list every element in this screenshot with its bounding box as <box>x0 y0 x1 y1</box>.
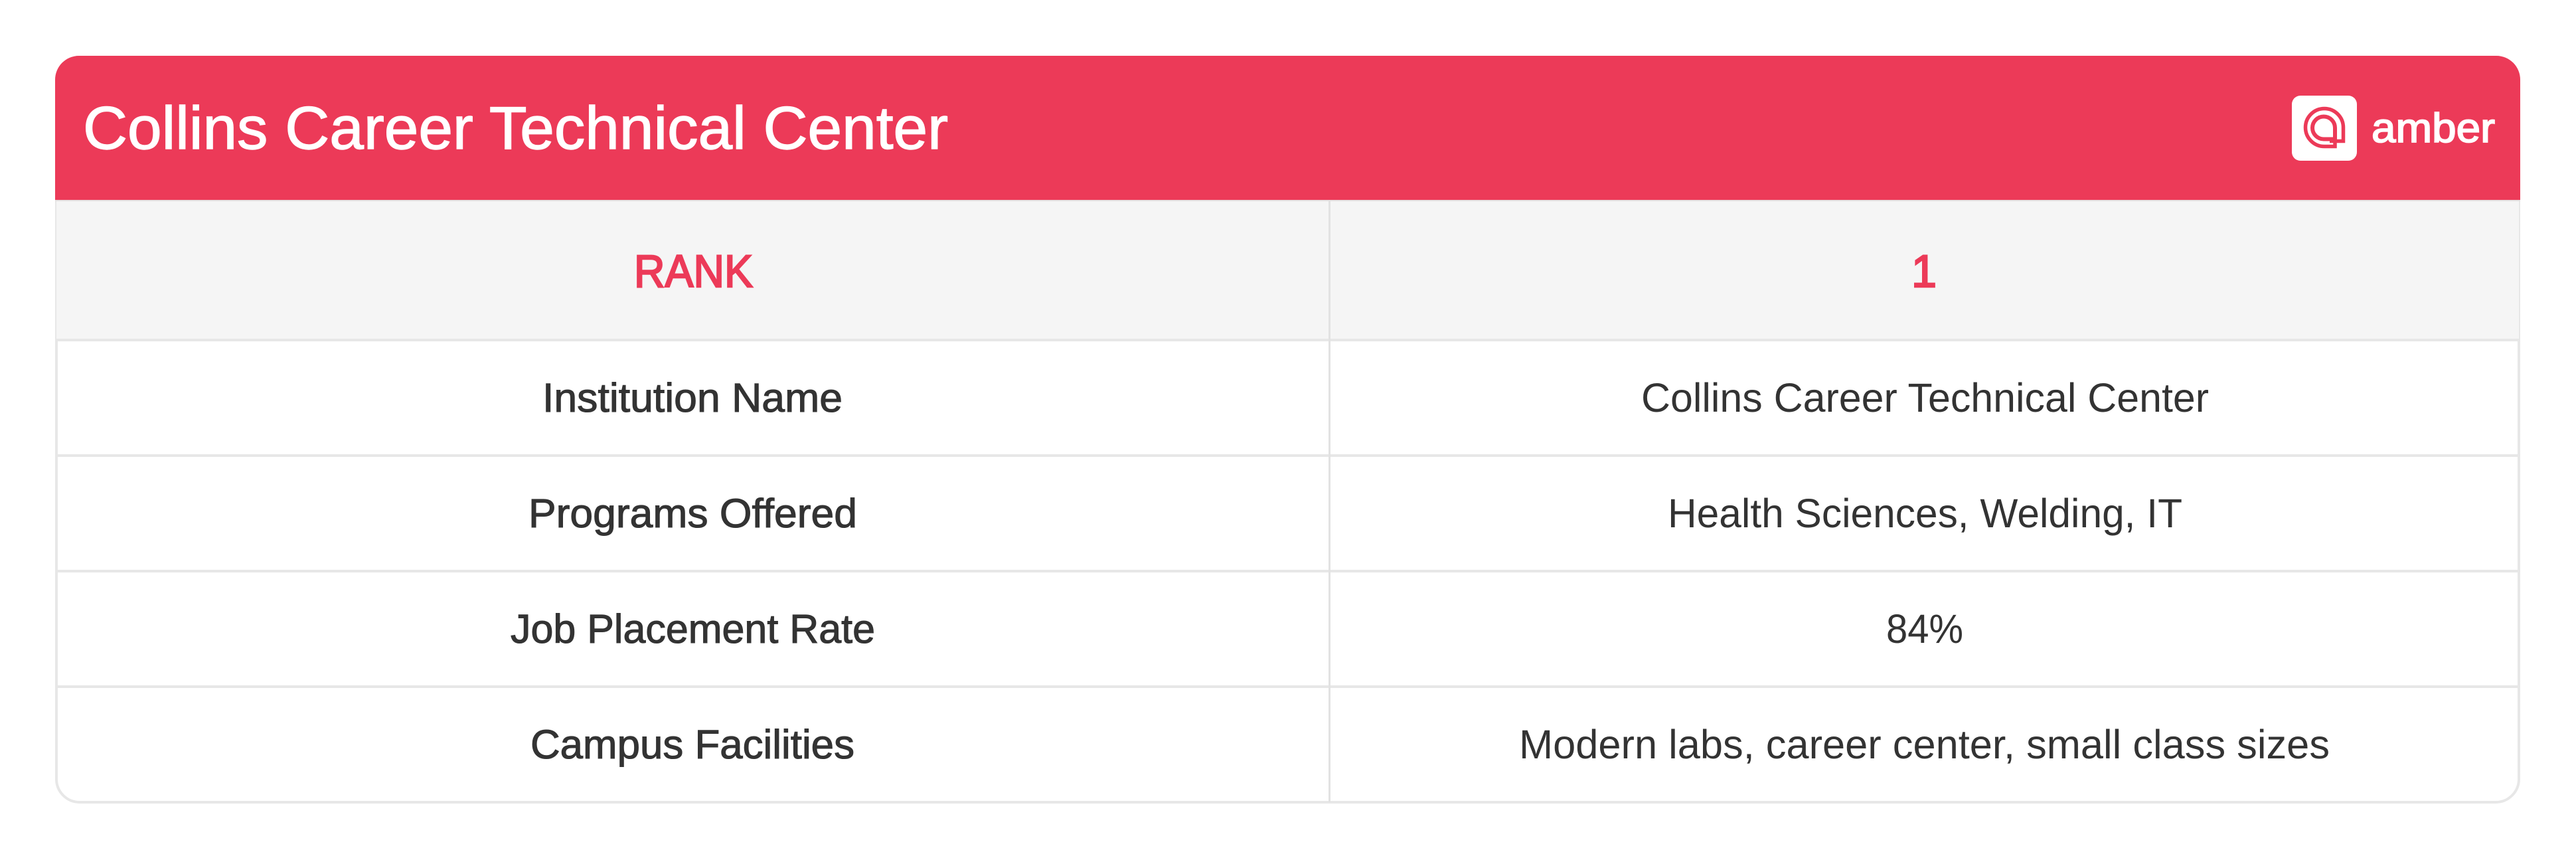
row: campus facilities: Modern labs, career center, small class sizes <box>1519 722 2330 767</box>
row: job placement rate: Job Placement Rate <box>511 606 875 651</box>
icon: amber mark <box>2292 96 2357 161</box>
row: rank: RANK <box>634 246 753 297</box>
logo wordmark: amber <box>2372 106 2495 151</box>
row: programs offered <box>528 491 2182 536</box>
row: campus facilities: Campus Facilities <box>530 722 854 767</box>
row: job placement rate <box>511 606 1963 651</box>
row: programs offered: Health Sciences, Welding, IT <box>1668 491 2182 536</box>
row: rank: 1 <box>1911 246 1937 297</box>
row: programs offered: Programs Offered <box>528 491 857 536</box>
row: institution name <box>542 375 2209 420</box>
row: job placement rate: 84% <box>1886 606 1963 651</box>
rank row background <box>56 201 2519 339</box>
row: institution name: Collins Career Technical Center <box>1641 375 2209 420</box>
header band <box>55 56 2520 201</box>
row dividers <box>55 201 2520 802</box>
title: Collins Career Technical Center <box>83 95 948 162</box>
logo: amber <box>2292 96 2495 161</box>
row: campus facilities <box>530 722 2330 767</box>
row: institution name: Institution Name <box>542 375 843 420</box>
row: rank <box>634 246 1937 297</box>
